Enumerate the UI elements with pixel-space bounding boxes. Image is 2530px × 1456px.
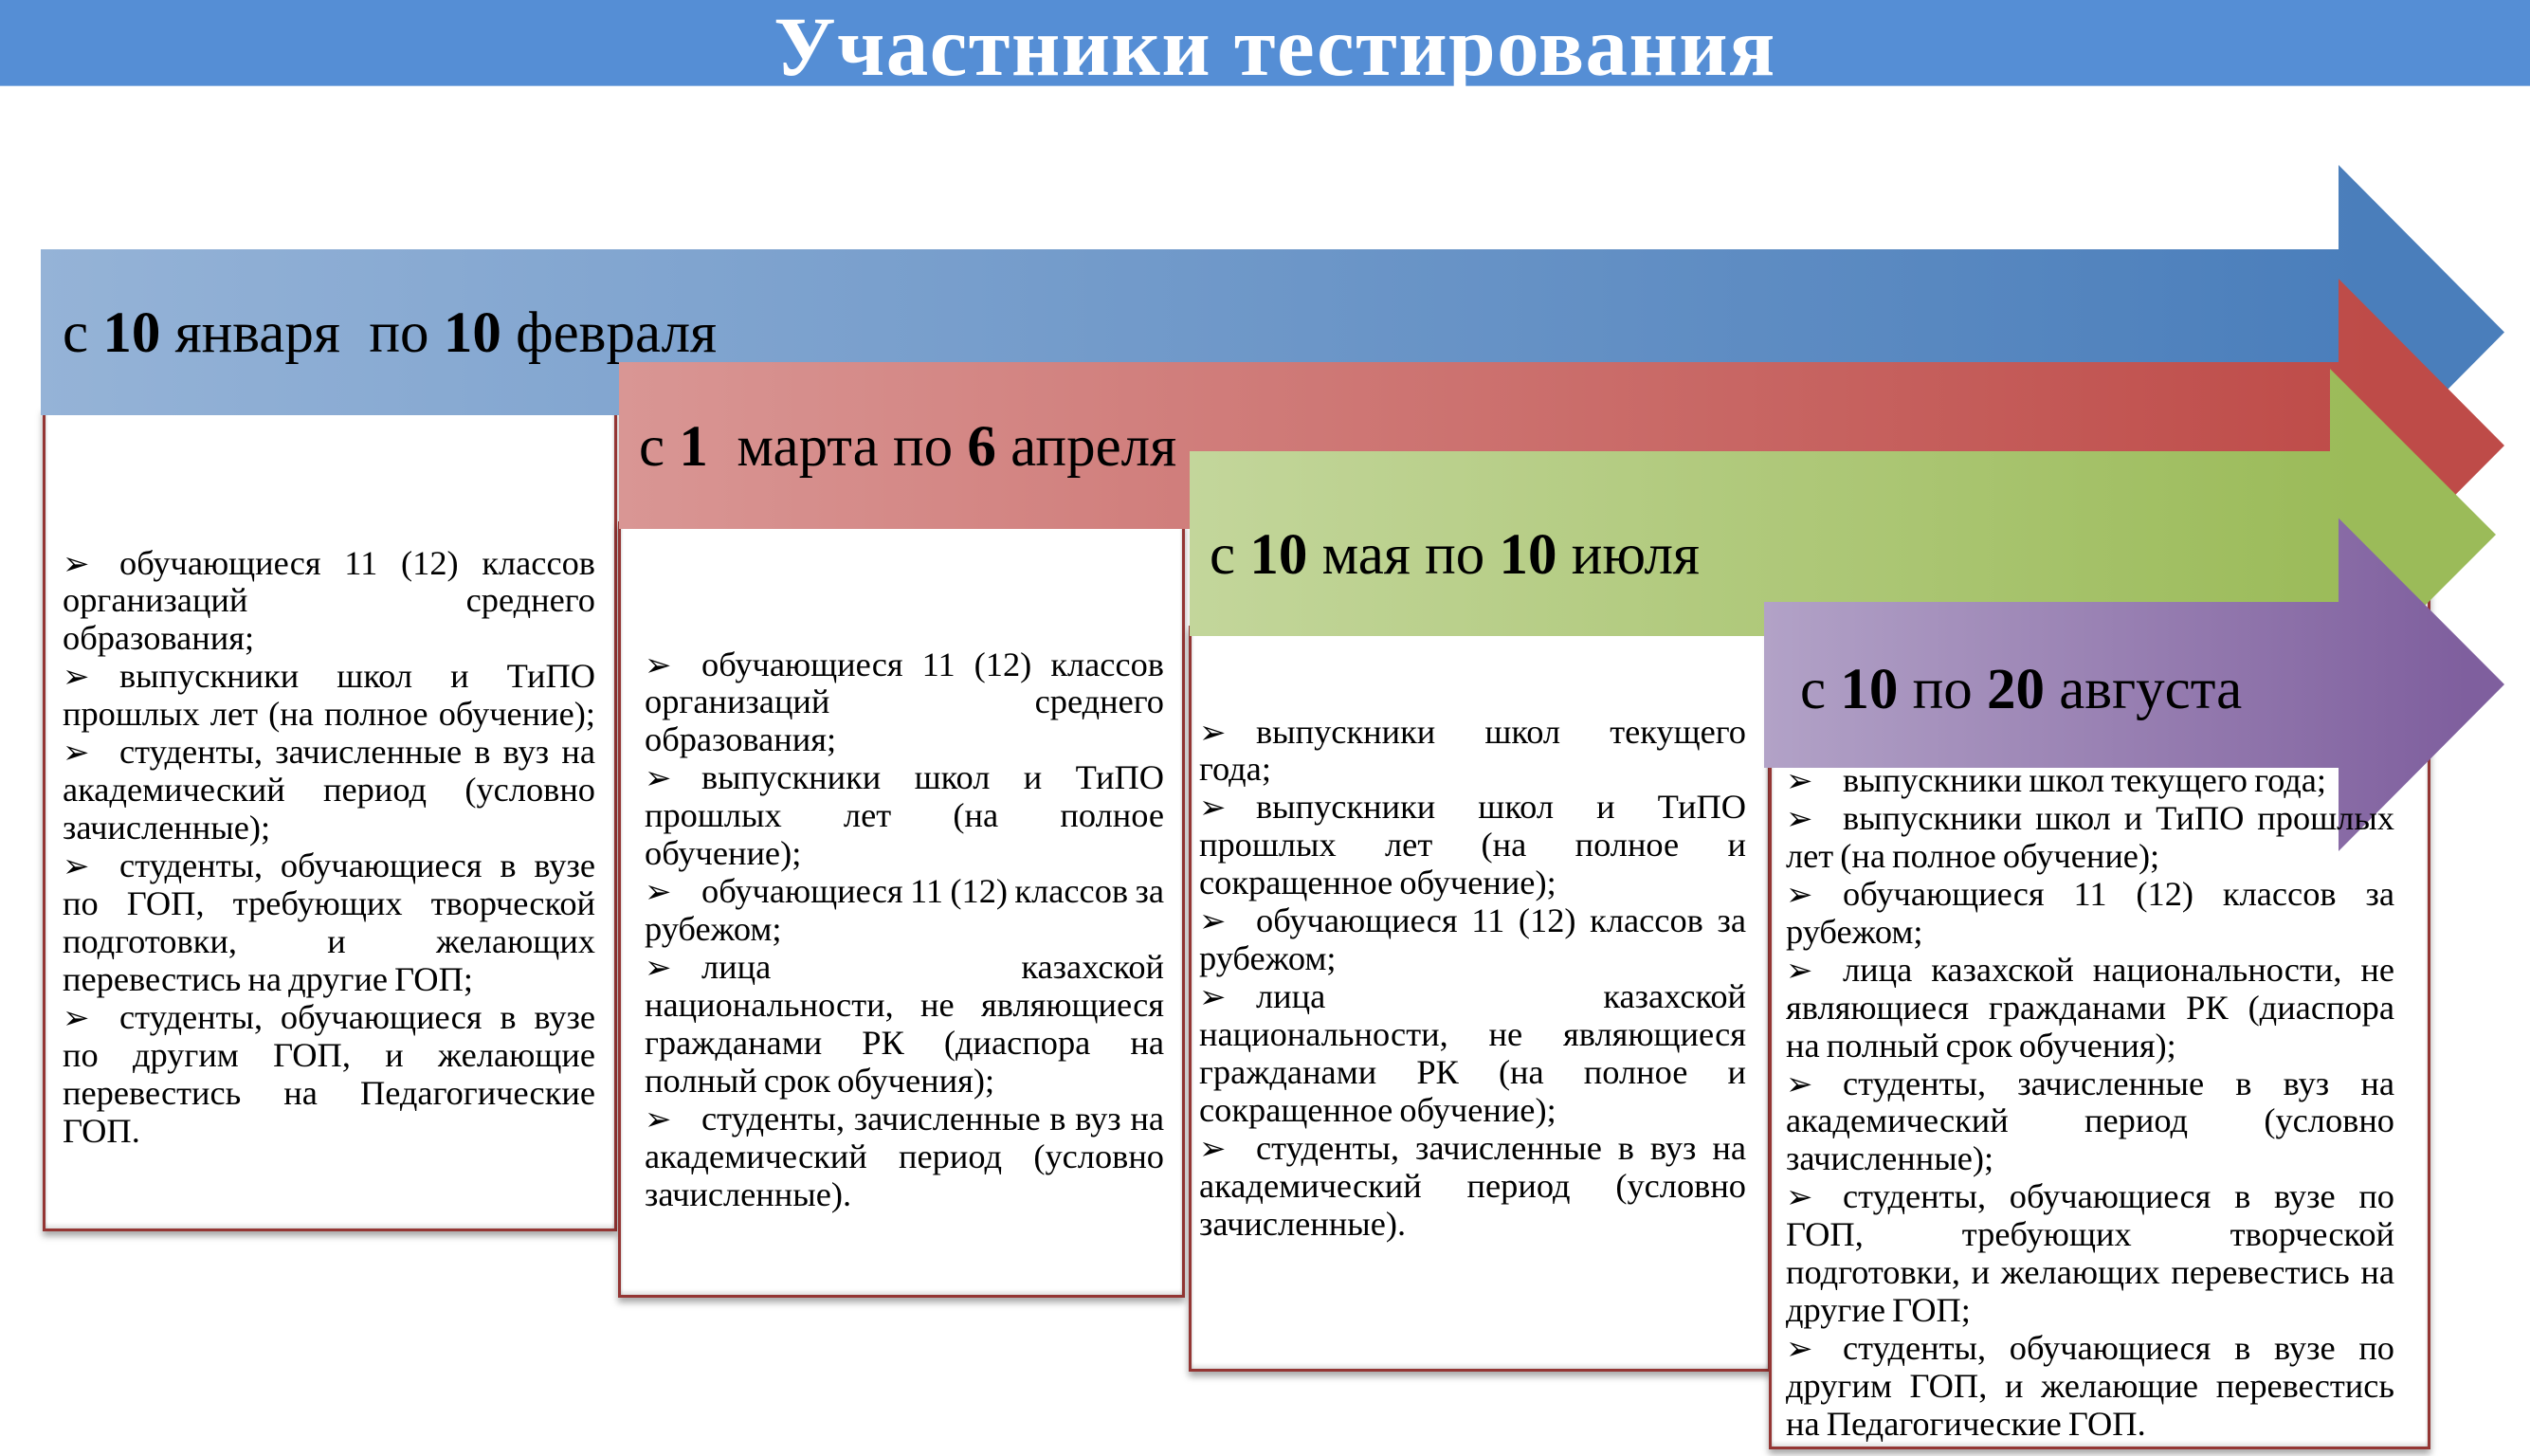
text: box 1 list: ➢ [63, 999, 89, 1037]
text: box 1 list: студенты, обучающиеся в вузе [119, 846, 595, 884]
text: box 4 list: выпускники школ и ТиПО прошлых [1843, 799, 2394, 837]
text: box 4 list: ➢ [1786, 1330, 1812, 1368]
text: box 4 list: ➢ [1786, 800, 1812, 838]
text: box 3 list: ➢ [1199, 713, 1227, 751]
text: box 3 list: рубежом; [1199, 939, 1337, 977]
text: box 2 list: обучающиеся 11 (12) классов [701, 645, 1164, 682]
text: box 2 list: обучение); [645, 834, 801, 872]
text: box 4 list: студенты, зачисленные в вуз на [1843, 1064, 2394, 1101]
text: box 3 list: академический период (условно [1199, 1167, 1746, 1205]
text: box 3 list: студенты, зачисленные в вуз на [1256, 1129, 1746, 1167]
text: box 4 list: обучающиеся 11 (12) классов за [1843, 875, 2394, 913]
text: box 4 list: подготовки, и желающих перевестись на [1786, 1253, 2394, 1291]
panel: box 4 frame [1769, 588, 2430, 1449]
text: box 1 list: по ГОП, требующих творческой [63, 884, 595, 922]
text: box 1 list: студенты, зачисленные в вуз на [119, 733, 595, 771]
text: box 3 list: ➢ [1199, 789, 1227, 827]
panel: box 1 frame [43, 408, 617, 1231]
text: box 1 list: прошлых лет (на полное обучение); [63, 695, 595, 733]
text: box 4 list: на полный срок обучения); [1786, 1027, 2176, 1065]
text: box 4 list: являющиеся гражданами РК (диаспора [1786, 989, 2394, 1027]
text: box 2 list: ➢ [645, 949, 671, 987]
text: box 2 list: прошлых лет (на полное [645, 796, 1164, 834]
title: Участники тестирования [774, 1, 1776, 94]
text: box 2 list: ➢ [645, 646, 671, 684]
text: box 4 list: выпускники школ текущего года; [1843, 761, 2326, 799]
text: box 4 list: ➢ [1786, 876, 1812, 914]
text: box 2 list: ➢ [645, 1101, 671, 1138]
text: box 4 list: ➢ [1786, 762, 1812, 800]
text: box 1 list: перевестись на Педагогические [63, 1074, 595, 1112]
text: box 1 list: ➢ [63, 734, 89, 772]
text: box 3 list [1199, 713, 1746, 1243]
text: box 1 list: перевестись на другие ГОП; [63, 960, 473, 998]
text: box 2 list: национальности, не являющиеся [645, 986, 1164, 1024]
text: box 4 list: студенты, обучающиеся в вузе по [1843, 1177, 2394, 1215]
text: box 2 list: лица казахской [701, 948, 1164, 986]
text: box 1 list: ➢ [63, 658, 89, 696]
text: box 4 list: на Педагогические ГОП. [1786, 1405, 2146, 1443]
text: box 2 list: зачисленные). [645, 1175, 851, 1213]
text: box 3 list: сокращенное обучение); [1199, 1091, 1556, 1129]
text: box 2 list: ➢ [645, 873, 671, 911]
text: box 1 list: организаций среднего [63, 581, 595, 619]
text: box 4 list: ГОП, требующих творческой [1786, 1215, 2394, 1253]
text: box 1 list: академический период (условно [63, 771, 595, 809]
text: box 2 list: академический период (условно [645, 1138, 1164, 1175]
text: box 2 list: организаций среднего [645, 682, 1164, 720]
text: box 3 list: выпускники школ и ТиПО [1256, 788, 1746, 826]
text: box 4 list: студенты, обучающиеся в вузе по [1843, 1329, 2394, 1367]
text: box 1 list: зачисленные); [63, 809, 270, 846]
text: box 3 list: гражданами РК (на полное и [1199, 1053, 1746, 1091]
text: box 1 list: ГОП. [63, 1112, 140, 1150]
arrow: 1 March to 6 April: с 1 марта по 6 апреля [639, 415, 1176, 479]
text: box 4 list: ➢ [1786, 1178, 1812, 1216]
text: box 2 list: выпускники школ и ТиПО [701, 758, 1164, 796]
header band [0, 0, 2530, 86]
text: box 3 list: ➢ [1199, 978, 1227, 1016]
text: box 2 list: образования; [645, 720, 836, 758]
text: box 2 list: ➢ [645, 759, 671, 797]
text: box 4 list: лет (на полное обучение); [1786, 837, 2159, 875]
text: box 3 list: сокращенное обучение); [1199, 864, 1556, 901]
text: box 3 list: прошлых лет (на полное и [1199, 826, 1746, 864]
text: box 1 list: обучающиеся 11 (12) классов [119, 544, 595, 582]
text: box 3 list: ➢ [1199, 1130, 1227, 1168]
text: box 2 list: студенты, зачисленные в вуз на [701, 1100, 1164, 1138]
panel: box 2 frame [618, 521, 1185, 1298]
text: box 2 list: гражданами РК (диаспора на [645, 1024, 1164, 1062]
text: box 4 list: лица казахской национальности, не [1843, 951, 2394, 989]
text: box 3 list: лица казахской [1256, 977, 1746, 1015]
text: box 2 list: рубежом; [645, 910, 781, 948]
text: box 1 list: ➢ [63, 544, 89, 582]
text: box 2 list: обучающиеся 11 (12) классов за [701, 872, 1164, 910]
arrow: 10 January to 10 February: с 10 января по 10 февраля [63, 301, 717, 365]
text: box 3 list: выпускники школ текущего [1256, 713, 1746, 751]
text: box 3 list: года; [1199, 750, 1271, 788]
panel: box 3 frame [1189, 626, 1771, 1372]
text: box 3 list: ➢ [1199, 902, 1227, 940]
text: box 4 list: академический период (условно [1786, 1101, 2394, 1139]
text: box 1 list: образования; [63, 619, 254, 657]
text: box 4 list: другим ГОП, и желающие перевестись [1786, 1367, 2394, 1405]
text: box 1 list: по другим ГОП, и желающие [63, 1036, 595, 1074]
text: box 4 list: ➢ [1786, 952, 1812, 990]
text: box 2 list: полный срок обучения); [645, 1062, 994, 1100]
text: box 4 list: рубежом; [1786, 913, 1922, 951]
text: box 4 list [1786, 761, 2394, 1443]
text: box 1 list: выпускники школ и ТиПО [119, 657, 595, 695]
text: box 1 list: студенты, обучающиеся в вузе [119, 998, 595, 1036]
arrow: 10 May to 10 July: с 10 мая по 10 июля [1210, 523, 1700, 587]
text: box 4 list: зачисленные); [1786, 1139, 1993, 1177]
text: box 2 list [645, 645, 1164, 1213]
text: box 3 list: национальности, не являющиеся [1199, 1015, 1746, 1053]
text: box 1 list [63, 544, 595, 1150]
text: box 4 list: другие ГОП; [1786, 1291, 1971, 1329]
text: box 4 list: ➢ [1786, 1065, 1812, 1103]
text: box 3 list: зачисленные). [1199, 1205, 1406, 1243]
text: box 3 list: обучающиеся 11 (12) классов за [1256, 901, 1746, 939]
text: box 1 list: подготовки, и желающих [63, 922, 595, 960]
arrow: 10 to 20 August: с 10 по 20 августа [1800, 658, 2242, 721]
text: box 1 list: ➢ [63, 847, 89, 885]
